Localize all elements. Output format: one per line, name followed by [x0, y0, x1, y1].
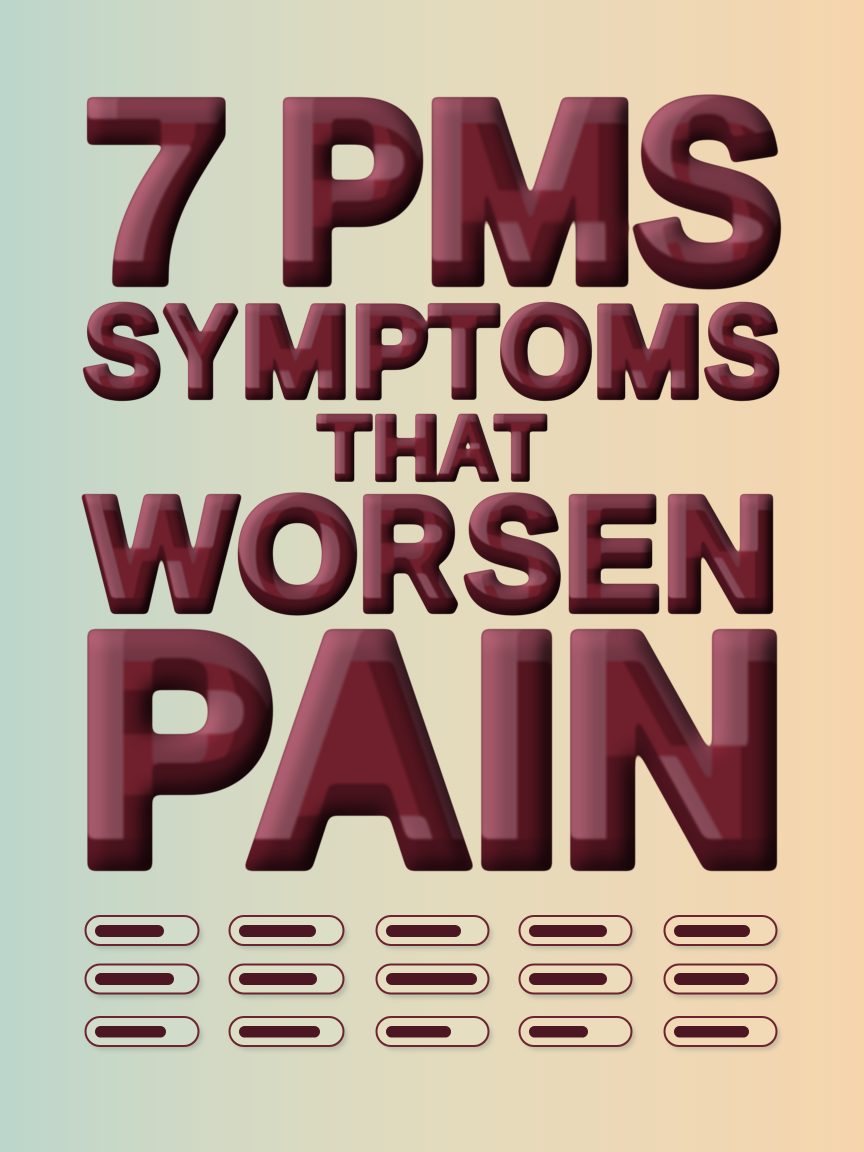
- word PMS: P: [277, 54, 422, 330]
- heading line: SYMPTOMS: S: [85, 282, 160, 422]
- heading line: PAIN: I: [473, 574, 560, 925]
- heading line: SYMPTOMS: [85, 282, 779, 422]
- placeholder pill grid: [86, 916, 780, 1050]
- heading line: PAIN: P: [80, 574, 271, 925]
- heading line: WORSEN: O: [238, 466, 357, 640]
- word PMS: S: [637, 54, 781, 330]
- pill shadows: [89, 920, 780, 1050]
- heading line: THAT: [319, 400, 545, 497]
- heading line: PAIN: N: [562, 574, 785, 925]
- heading line: WORSEN: N: [664, 466, 777, 640]
- title: [80, 54, 785, 925]
- heading line: SYMPTOMS: S: [706, 282, 779, 422]
- heading line: PAIN: A: [253, 574, 465, 925]
- heading line: THAT: H: [373, 400, 439, 497]
- heading line: THAT: T: [319, 400, 370, 497]
- heading line: THAT: A: [439, 400, 497, 497]
- heading line: SYMPTOMS: M: [242, 282, 348, 422]
- heading line: SYMPTOMS: O: [500, 282, 592, 422]
- heading line: PAIN: [80, 574, 785, 925]
- heading line: WORSEN: W: [89, 466, 234, 640]
- pill row 2: [86, 964, 776, 994]
- heading line: SYMPTOMS: M: [594, 282, 702, 422]
- heading line: 7 PMS: [86, 54, 781, 330]
- heading line: THAT: T: [496, 400, 545, 497]
- heading line: WORSEN: S: [466, 466, 560, 640]
- heading line: WORSEN: R: [360, 466, 457, 640]
- word PMS: M: [425, 54, 635, 330]
- pill row 1: [86, 916, 776, 945]
- filled centre of the letter A: [340, 712, 385, 768]
- heading line: SYMPTOMS: T: [431, 282, 497, 422]
- numeral 7: 7: [86, 54, 227, 330]
- heading line: SYMPTOMS: Y: [164, 282, 236, 422]
- heading line: WORSEN: [89, 466, 777, 640]
- heading line: WORSEN: E: [565, 466, 659, 640]
- pill row 3: [86, 1017, 776, 1046]
- heading line: SYMPTOMS: P: [353, 282, 427, 422]
